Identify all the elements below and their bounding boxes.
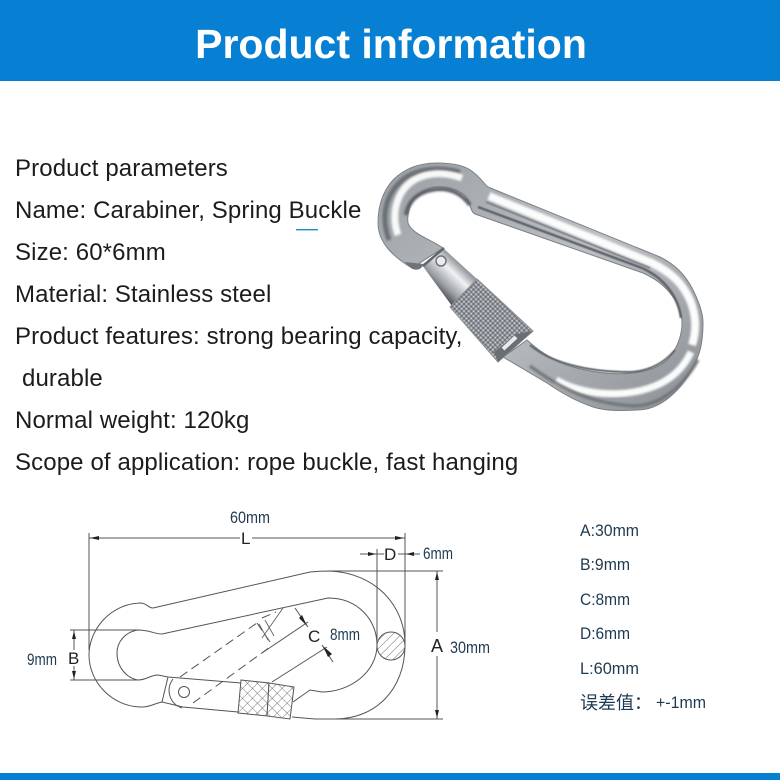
dimension list: C:8mm	[580, 590, 630, 609]
product parameters text block: durable	[22, 365, 103, 392]
gate pin	[436, 256, 446, 266]
dimension labels: L	[241, 529, 250, 548]
dimension list: L:60mm	[580, 659, 639, 678]
dimension list: 误差值：	[580, 693, 652, 713]
carabiner body	[378, 163, 703, 411]
product parameters text block: Normal weight: 120kg	[15, 407, 250, 434]
product parameters text block: Scope of application: rope buckle, fast hanging	[15, 449, 518, 476]
dimension list: D:6mm	[580, 624, 630, 643]
carabiner outline	[89, 571, 405, 719]
hatched cross section	[377, 632, 405, 660]
dimension list: B:9mm	[580, 555, 630, 574]
product parameters text block: Name: Carabiner, Spring Buckle	[15, 197, 361, 224]
product parameters text block: Product features: strong bearing capacity,	[15, 323, 463, 350]
product parameters text block: Material: Stainless steel	[15, 281, 271, 308]
product parameters text block	[15, 155, 518, 476]
dimension labels: 9mm	[27, 650, 57, 669]
dimension list: +-1mm	[656, 693, 706, 712]
knurled sleeve	[238, 680, 294, 719]
dimension lines	[70, 533, 443, 719]
header banner	[0, 0, 780, 81]
title: Product information	[195, 21, 587, 67]
dimension list: A:30mm	[580, 521, 639, 540]
dimension labels: 30mm	[450, 638, 490, 657]
product parameters text block: Product parameters	[15, 155, 228, 182]
dimension drawing	[70, 533, 443, 719]
dimension labels: D	[384, 545, 396, 564]
dimension labels: A	[431, 636, 443, 656]
dimension labels: 8mm	[330, 625, 360, 644]
dimension labels: C	[308, 627, 320, 646]
dimension labels: 6mm	[423, 544, 453, 563]
carabiner photo illustration	[378, 163, 703, 411]
product parameters text block: Size: 60*6mm	[15, 239, 166, 266]
dimension labels: 60mm	[230, 508, 270, 527]
blue tick mark	[296, 229, 318, 230]
dimension labels: B	[68, 649, 79, 668]
gate	[405, 248, 478, 306]
knurled locking sleeve	[450, 279, 533, 362]
dimension list	[580, 521, 706, 713]
bottom bar	[0, 773, 780, 780]
arrowheads	[72, 536, 439, 718]
dimension labels	[27, 508, 490, 669]
